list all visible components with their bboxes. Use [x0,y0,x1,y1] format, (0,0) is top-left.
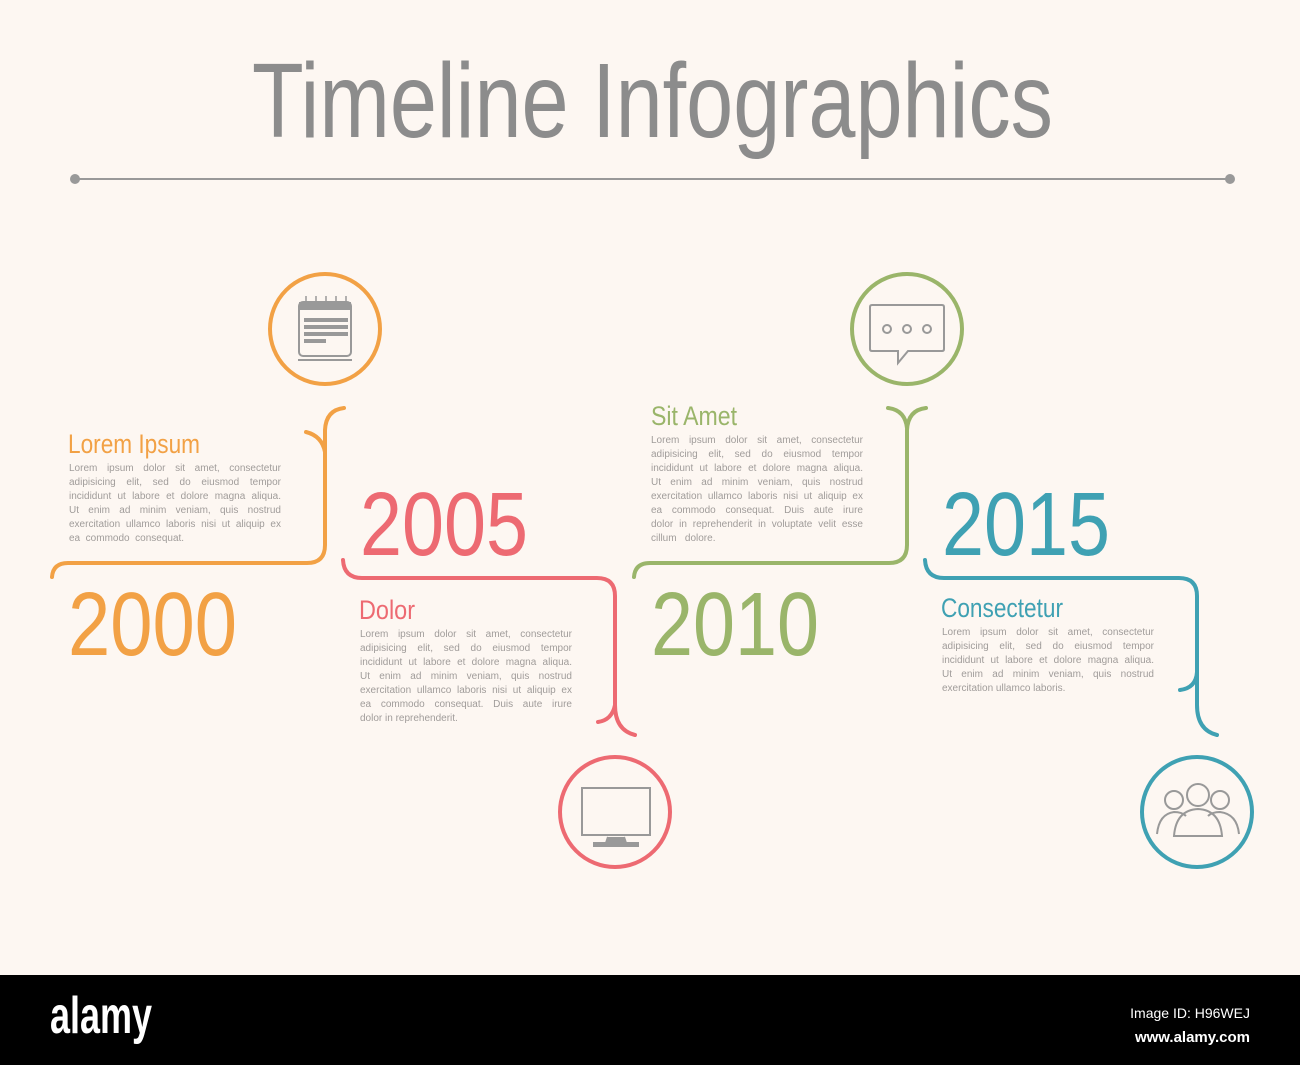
text: lorem ipsum: Ut enim ad minim veniam, quis nostrud [69,505,281,516]
text: sit amet [651,435,863,544]
text: dolor: dolor in reprehenderit. [360,713,458,724]
year 2000: 2000 [68,575,237,675]
text: consectetur: exercitation ullamco laboris. [942,683,1065,694]
text: sit amet: Lorem ipsum dolor sit amet, consectetur [651,435,863,446]
text: sit amet: dolor in reprehenderit in voluptate velit esse [651,519,863,530]
text: dolor: Lorem ipsum dolor sit amet, consectetur [360,629,572,640]
icon: calendar [298,296,352,361]
text: lorem ipsum: ea commodo consequat. [69,533,184,544]
text: dolor: Ut enim ad minim veniam, quis nostrud [360,671,572,682]
text: lorem ipsum: Lorem ipsum dolor sit amet, consectetur [69,463,281,474]
text: sit amet: incididunt ut labore et dolore magna aliqua. [651,463,863,474]
title [70,42,1235,184]
footer bar [0,975,1300,1065]
text: dolor [360,629,572,724]
footer id: Image ID: H96WEJ [1130,1005,1250,1021]
year 2010: 2010 [651,575,819,675]
text: dolor: exercitation ullamco laboris nisi ut aliquip ex [360,685,572,696]
text: consectetur: incididunt ut labore et dolore magna aliqua. [942,655,1154,666]
text: consectetur: adipisicing elit, sed do eiusmod tempor [942,641,1154,652]
text: lorem ipsum [69,463,281,544]
text: dolor: adipisicing elit, sed do eiusmod tempor [360,643,572,654]
icon: monitor [581,787,651,847]
icon: chat [869,304,945,366]
footer id: www.alamy.com [1135,1029,1250,1046]
text: lorem ipsum: exercitation ullamco laboris nisi ut aliquip ex [69,519,281,530]
text: consectetur: Ut enim ad minim veniam, quis nostrud [942,669,1154,680]
year 2015: 2015 [942,475,1110,575]
title: Timeline Infographics [252,42,1053,160]
icon: people [1156,783,1240,837]
text: consectetur: Lorem ipsum dolor sit amet, consectetur [942,627,1154,638]
text: sit amet: ea commodo consequat. Duis aute irure [651,505,863,516]
text: sit amet: cillum dolore. [651,533,715,544]
heading: Lorem Ipsum: Lorem Ipsum [68,429,200,459]
heading: Consectetur: Consectetur [941,593,1063,623]
text: dolor: ea commodo consequat. Duis aute irure [360,699,572,710]
text: consectetur [942,627,1154,694]
heading: Sit Amet: Sit Amet [651,401,737,431]
text: sit amet: adipisicing elit, sed do eiusmod tempor [651,449,863,460]
blue connector [925,560,1252,867]
footer id [1130,1005,1250,1046]
orange connector [52,274,380,577]
red connector [343,560,670,867]
green connector [634,274,962,577]
text: lorem ipsum: adipisicing elit, sed do eiusmod tempor [69,477,281,488]
text: lorem ipsum: incididunt ut labore et dolore magna aliqua. [69,491,281,502]
text: dolor: incididunt ut labore et dolore magna aliqua. [360,657,572,668]
year 2005: 2005 [360,475,528,575]
text: sit amet: exercitation ullamco laboris nisi ut aliquip ex [651,491,863,502]
text: sit amet: Ut enim ad minim veniam, quis nostrud [651,477,863,488]
heading: Dolor: Dolor [359,595,415,625]
